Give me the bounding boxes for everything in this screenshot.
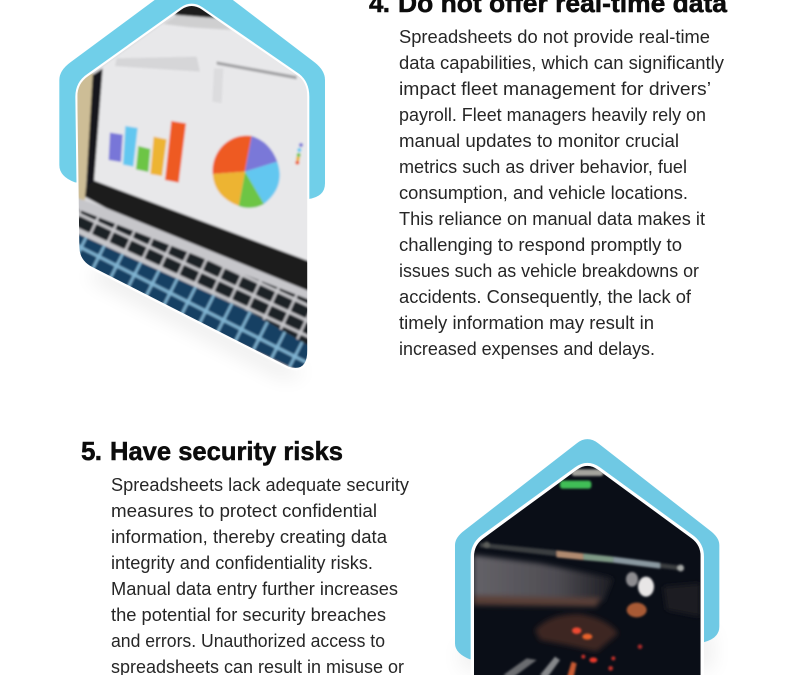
text block: section 5 body: Spreadsheets lack adequate security (111, 474, 410, 495)
right dark monitor (663, 583, 700, 617)
screen text lines (115, 57, 200, 72)
text block: section 4 body: issues such as vehicle breakdowns or (399, 260, 699, 281)
white frame (471, 463, 704, 675)
photo background (84, 14, 296, 368)
text block: section 5 body: integrity and confidentiality risks. (111, 552, 373, 573)
text block: section 4 body: accidents. Consequently, the lack of (399, 286, 692, 307)
sidebar table rows (213, 69, 222, 102)
text block: section 5 body: the potential for security breaches (111, 604, 386, 625)
text block: section 4 body: impact fleet management for drivers’ (399, 78, 711, 99)
text block: section 4 body: payroll. Fleet managers heavily rely on (399, 104, 706, 125)
text block: section 4 body: consumption, and vehicle locations. (399, 182, 688, 203)
screen (93, 15, 310, 262)
image block: dark keyboard photo in house shape (455, 439, 719, 675)
text block: section 4 body: challenging to respond promptly to (399, 234, 682, 255)
white frame (75, 4, 309, 370)
bar chart (109, 121, 186, 183)
text block: section 4 body: manual updates to monitor crucial (399, 130, 679, 151)
text block: section 4 body: increased expenses and delays. (399, 338, 655, 359)
keyboard keys (503, 658, 537, 675)
text block: section 5 body: and errors. Unauthorized access to (111, 630, 385, 651)
text block: section 4 body: This reliance on manual data makes it (399, 208, 705, 229)
text block: section 4 body: Spreadsheets do not provide real-time (399, 26, 710, 47)
text block: section 5 body: measures to protect confidential (111, 500, 377, 521)
dark top of the screen (174, 6, 216, 20)
pie chart (213, 136, 280, 208)
text block: section 4 body (399, 26, 725, 359)
soft shadow (460, 630, 713, 670)
toolbar (163, 15, 232, 30)
white light blobs (638, 577, 654, 597)
photo background (470, 460, 703, 675)
pie legend (295, 143, 303, 165)
text block: section 4 body: metrics such as driver behavior, fuel (399, 156, 687, 177)
dark keys (73, 207, 310, 347)
left bezel (86, 68, 103, 188)
grey top label (572, 469, 603, 476)
coloured status strip (480, 543, 683, 571)
soft shadow (87, 267, 307, 378)
blue backing shape (455, 439, 719, 659)
blue keys (79, 233, 308, 368)
silver deck (78, 198, 307, 300)
sidebar table header (217, 61, 297, 79)
text block: section 5 body (111, 474, 410, 675)
text block: section 5 body: Manual data entry further increases (111, 578, 398, 599)
heading: section 5: 5. (81, 436, 102, 466)
green label (560, 481, 591, 489)
laptop photo (73, 0, 313, 377)
wall at left (78, 73, 94, 201)
bottom bezel (85, 181, 310, 292)
monitor glow band (473, 555, 613, 602)
orange hand reflection (627, 603, 647, 617)
dark photo (470, 460, 703, 675)
blue backing shape (59, 0, 325, 199)
image block: laptop with charts in house shape (59, 0, 325, 378)
text block: section 4 body: timely information may result in (399, 312, 654, 333)
heading: section 5: Have security risks (110, 436, 343, 466)
text block: section 4 body: data capabilities, which can significantly (399, 52, 725, 73)
text block: section 5 body: information, thereby creating data (111, 526, 388, 547)
red key lights (572, 627, 581, 634)
hand (535, 614, 618, 652)
